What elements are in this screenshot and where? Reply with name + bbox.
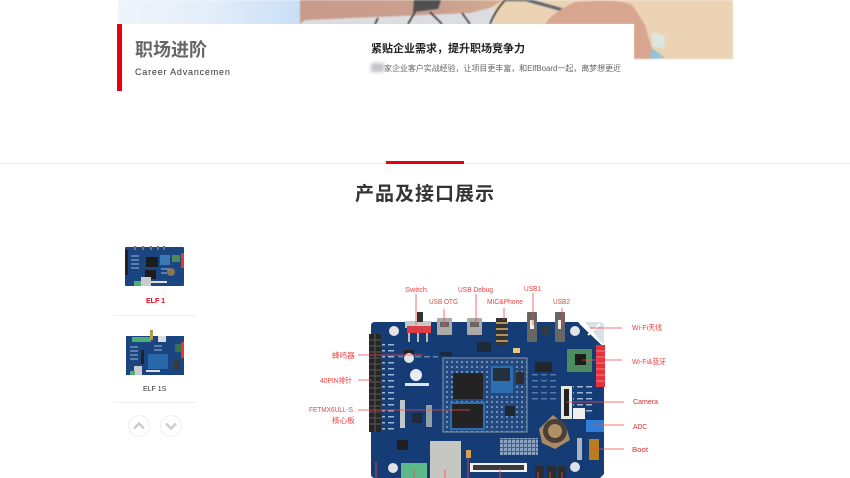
callout labels: Switch [405, 285, 427, 294]
boot [589, 439, 599, 460]
thumbnail: ELF 1S [126, 330, 184, 375]
callout labels: Boot [632, 445, 649, 454]
callout labels [309, 284, 666, 454]
callout labels: 核心板 [332, 415, 355, 425]
ffc [470, 463, 527, 472]
grid patch [500, 438, 538, 455]
lower ic [397, 440, 408, 450]
ethernet [430, 441, 461, 478]
callout labels: Wi-Fi&蓝牙 [632, 356, 666, 366]
camera connector [561, 386, 572, 419]
icon: next arrow [160, 415, 182, 437]
battery [539, 415, 570, 449]
icon: previous arrow [128, 415, 150, 437]
selector divider 2 [114, 402, 196, 403]
ic small [477, 342, 491, 352]
divider accent [386, 161, 464, 164]
callout labels: MIC&Phone [487, 297, 523, 306]
section divider [0, 163, 850, 164]
callout labels: FETMX6ULL-S [309, 405, 353, 414]
silk text areas [382, 342, 396, 430]
callout labels: USB OTG [429, 297, 458, 306]
product selector [125, 246, 184, 393]
callout labels: USB1 [524, 284, 541, 293]
callout labels: USB Debug [458, 285, 493, 294]
red header [596, 345, 605, 387]
callout labels: Wi-Fi天线 [632, 322, 662, 332]
selector divider 1 [114, 315, 196, 316]
thumbnail: ELF 1 [125, 246, 184, 286]
section title: 产品及接口展示 [355, 184, 495, 205]
buttons [535, 466, 544, 478]
caption panel [117, 24, 634, 91]
callout labels: Camera [633, 397, 659, 406]
wifi module [567, 349, 592, 372]
callout labels: USB2 [553, 297, 570, 306]
caption title: 紧贴企业需求，提升职场竞争力 [371, 43, 525, 55]
pin header left [369, 334, 381, 432]
board photo [369, 312, 605, 478]
USB1 and USB2 [527, 312, 537, 342]
caption heading: 职场进阶 [135, 40, 207, 60]
caption body text: 家企业客户实战经验，让项目更丰富，和ElfBoard一起，离梦想更近 [384, 64, 621, 73]
terminal [401, 463, 427, 478]
switch [405, 321, 431, 328]
label: ELF 1S: ELF 1S [143, 386, 166, 393]
callout labels: 蜂鸣器 [332, 350, 355, 360]
caption subheading: Career Advancemen [135, 67, 231, 77]
core board [443, 358, 527, 432]
callout lines [358, 293, 624, 478]
callout labels: 40PIN排针 [320, 375, 352, 385]
USB connectors [437, 318, 452, 335]
logo [410, 369, 422, 381]
ADC [586, 420, 604, 432]
photo banner [118, 0, 734, 60]
red accent bar [117, 24, 122, 91]
callout labels: ADC [633, 422, 647, 431]
label: ELF 1: ELF 1 [146, 298, 165, 305]
audio jack [496, 318, 507, 345]
